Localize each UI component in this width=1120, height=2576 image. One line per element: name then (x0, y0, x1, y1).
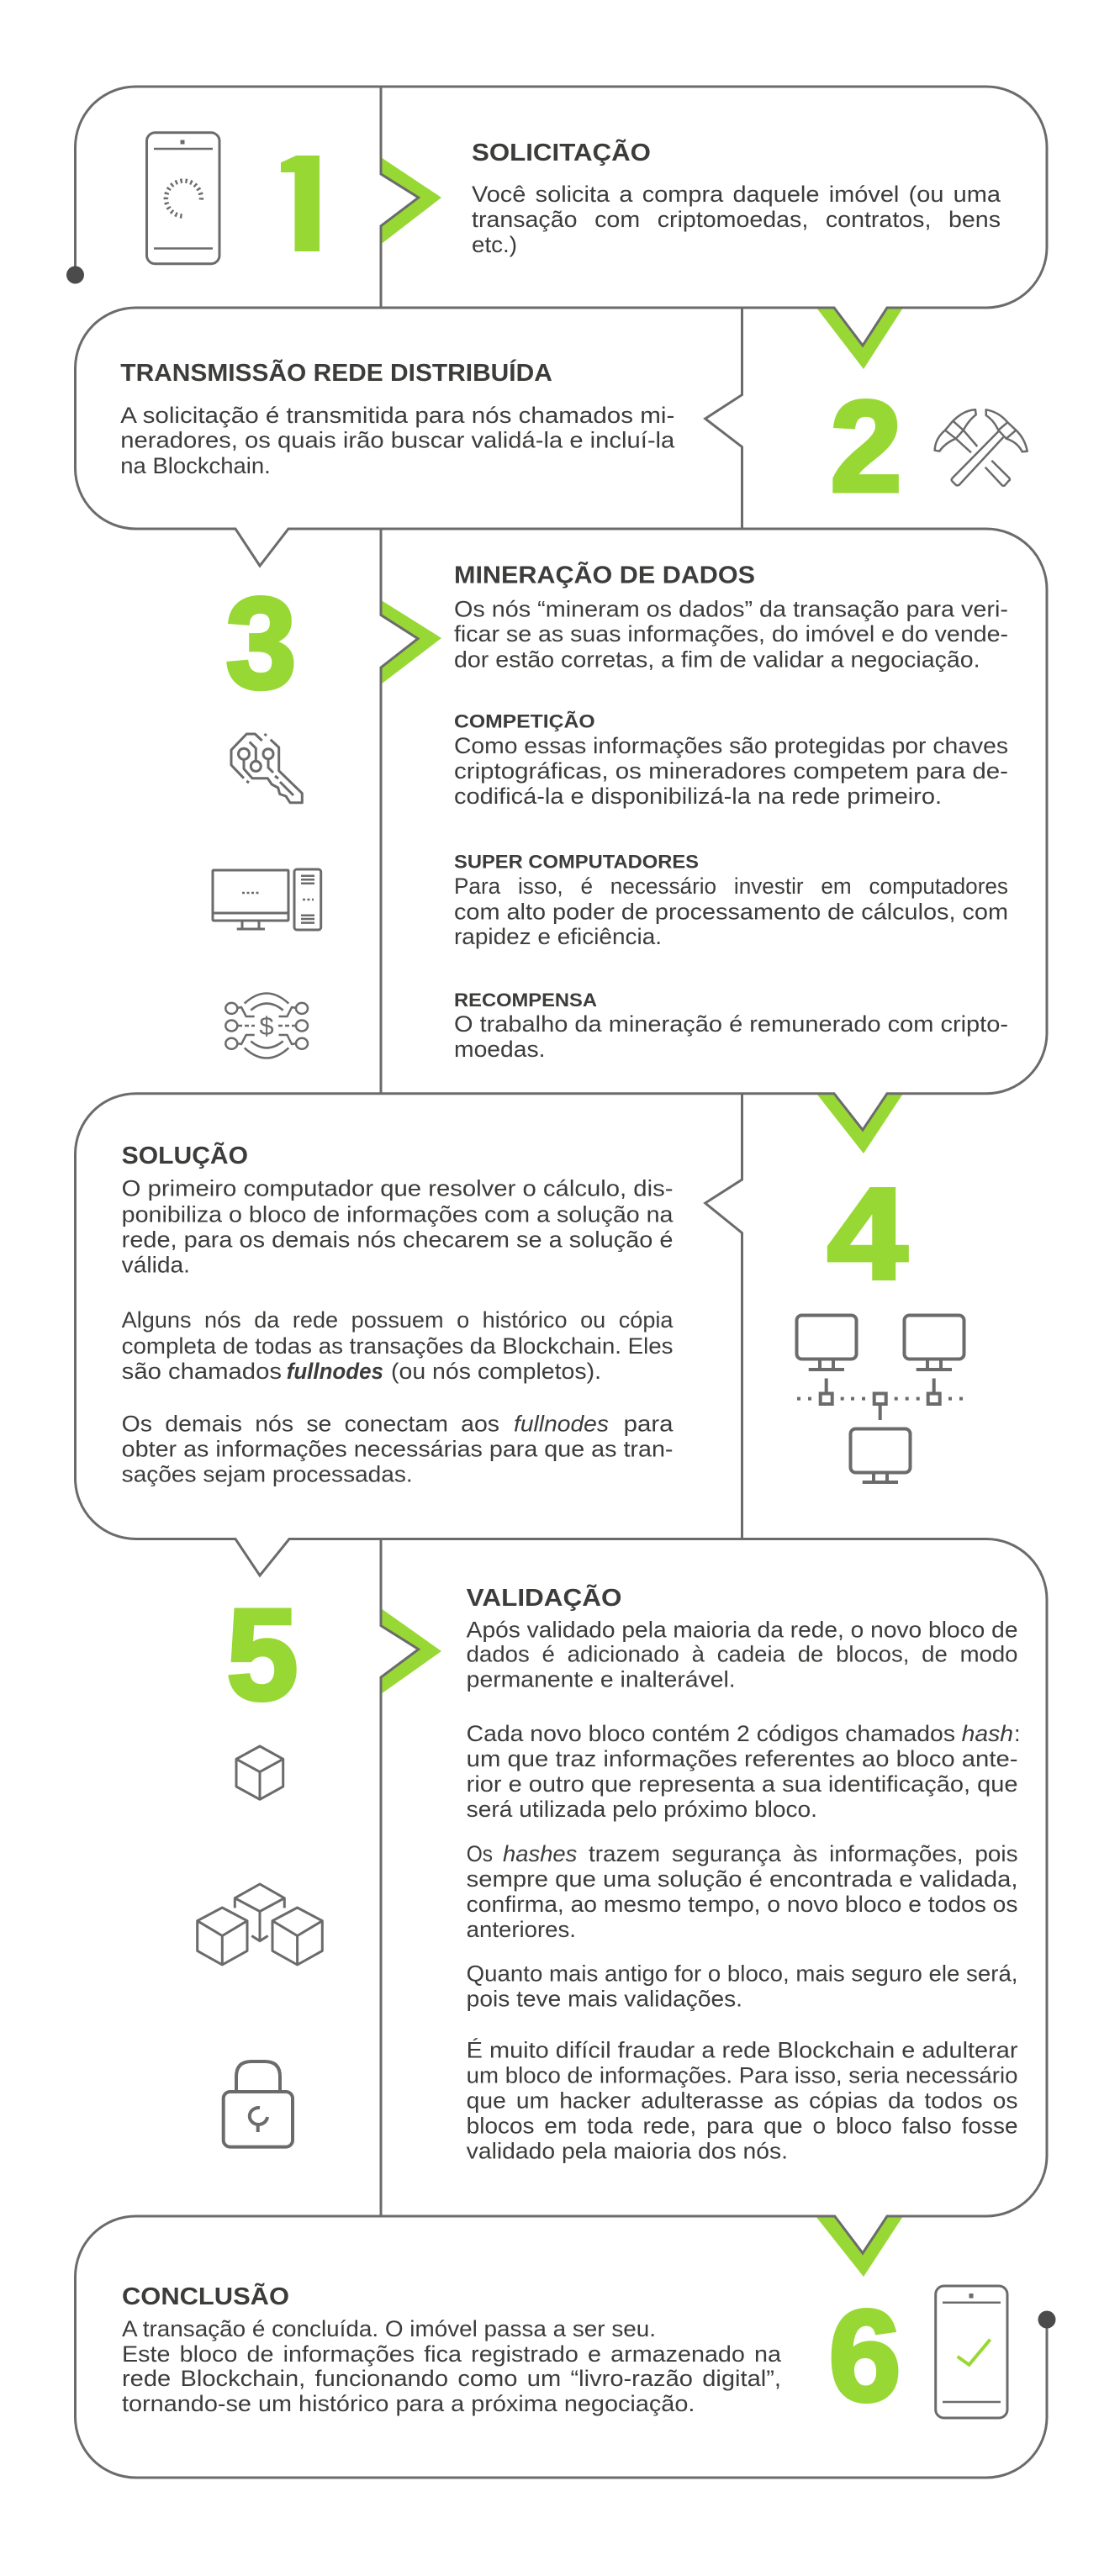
paragraph 1: ponibiliza o bloco de informações com a solução na (122, 1201, 674, 1227)
end dot (1038, 2310, 1056, 2329)
heading: SOLICITAÇÃO (472, 138, 651, 166)
heading: SOLUÇÃO (122, 1141, 248, 1169)
paragraph 3: para (624, 1412, 674, 1437)
paragraph 2 (467, 1721, 1021, 1822)
paragraph 2: rior e outro que representa a sua identificação, que (467, 1771, 1017, 1797)
body text (472, 182, 1001, 257)
paragraph 2: um que traz informações referentes ao bloco ante- (467, 1746, 1017, 1771)
paragraph 4 (467, 1961, 1017, 2012)
heading: MINERAÇÃO DE DADOS (454, 560, 755, 589)
super computadores text: rapidez e eficiência. (454, 924, 662, 949)
body text: etc.) (472, 232, 517, 257)
icon: crossed pickaxes (935, 409, 1028, 486)
paragraph 3: Os (467, 1841, 493, 1866)
paragraph 2: : (1014, 1721, 1021, 1746)
paragraph 1: válida. (122, 1252, 190, 1277)
paragraph 3 (467, 1841, 1017, 1942)
competição text (454, 733, 1008, 809)
body text (122, 2316, 782, 2416)
paragraph 3: Os demais nós se conectam aos (122, 1412, 499, 1437)
body text: Você solicita a compra daquele imóvel (ou uma (472, 182, 1001, 207)
body text: na Blockchain. (120, 453, 271, 478)
subheading: competição: COMPETIÇÃO (454, 711, 595, 732)
competição text: codificá-la e disponibilizá-la na rede primeiro. (454, 784, 942, 809)
paragraph 3: confirma, ao mesmo tempo, o novo bloco e todos os (467, 1892, 1017, 1917)
paragraph 3: sações sejam processadas. (122, 1462, 413, 1487)
icon: computer network (797, 1315, 964, 1482)
competição text: criptográficas, os mineradores competem para de- (454, 758, 1008, 784)
heading: VALIDAÇÃO (467, 1583, 622, 1612)
panel 2: transmissão rede distribuída (120, 358, 1028, 519)
paragraph 5: validado pela maioria dos nós. (467, 2139, 788, 2164)
icon: desktop computer (213, 869, 321, 930)
paragraph 2: fullnodes (287, 1359, 383, 1384)
paragraph 1: Após validado pela maioria da rede, o novo bloco de (467, 1617, 1017, 1642)
icon: phone with check (936, 2286, 1007, 2418)
paragraph 5: que um hacker adulterasse as cópias da todos os (467, 2088, 1017, 2114)
body text: tornando-se um histórico para a próxima negociação. (122, 2391, 695, 2416)
paragraph 2: Alguns nós da rede possuem o histórico ou cópia (122, 1307, 674, 1333)
paragraph 1 (122, 1176, 674, 1277)
paragraph 2: hash (962, 1721, 1013, 1746)
recompensa text: O trabalho da mineração é remunerado com cripto- (454, 1011, 1008, 1037)
heading: TRANSMISSÃO REDE DISTRIBUÍDA (120, 358, 552, 387)
recompensa text (454, 1011, 1008, 1062)
number 4: 4 (827, 1162, 907, 1306)
icon: circuit key (231, 734, 302, 803)
icon: dollar network: $ (259, 1011, 274, 1041)
icon: single block (236, 1746, 283, 1799)
paragraph 2: são chamados (122, 1359, 282, 1384)
super computadores text: com alto poder de processamento de cálculos, com (454, 900, 1008, 925)
paragraph 1: permanente e inalterável. (467, 1667, 736, 1692)
paragraph 3: anteriores. (467, 1917, 576, 1942)
paragraph 3: obter as informações necessárias para que as tran- (122, 1437, 673, 1462)
panel 6: conclusão (122, 2282, 1007, 2428)
paragraph 1: dados é adicionado à cadeia de blocos, de modo (467, 1642, 1017, 1667)
paragraph 2: será utilizada pelo próximo bloco. (467, 1797, 817, 1822)
body text: A solicitação é transmitida para nós chamados mi- (120, 403, 674, 428)
paragraph 4: Quanto mais antigo for o bloco, mais seguro ele será, (467, 1961, 1017, 1987)
paragraph 2: (ou nós completos). (391, 1359, 601, 1384)
column dividers with arrow notches (381, 87, 742, 2216)
paragraph 3: trazem segurança às informações, pois (589, 1841, 1017, 1866)
super computadores text (454, 874, 1008, 949)
paragraph 2: completa de todas as transações da Blockchain. Eles (122, 1333, 673, 1359)
subheading: super computadores: SUPER COMPUTADORES (454, 852, 699, 873)
body text: Os nós “mineram os dados” da transação para veri- (454, 597, 1008, 622)
number 2: 2 (831, 374, 901, 519)
paragraph 3: hashes (503, 1841, 577, 1866)
number 6: 6 (829, 2283, 901, 2428)
number 1: 1 (250, 128, 359, 282)
paragraph 3: sempre que uma solução é encontrada e validada, (467, 1866, 1017, 1892)
body text: dor estão corretas, a fim de validar a negociação. (454, 647, 980, 673)
paragraph 3: fullnodes (514, 1412, 609, 1437)
icon: phone loading (146, 133, 219, 264)
heading: CONCLUSÃO (122, 2282, 289, 2310)
body text (454, 597, 1008, 673)
super computadores text: Para isso, é necessário investir em computadores (454, 874, 1008, 899)
paragraph 3 (122, 1412, 674, 1487)
start dot (66, 266, 84, 284)
body text: neradores, os quais irão buscar validá-la e incluí-la (120, 428, 675, 453)
panel 4: solução (122, 1141, 964, 1487)
paragraph 5: É muito difícil fraudar a rede Blockchain e adulterar (467, 2038, 1018, 2063)
icon: padlock (224, 2061, 293, 2147)
icon: three blocks (198, 1884, 322, 1965)
body text: ficar se as suas informações, do imóvel e do vende- (454, 621, 1008, 647)
paragraph 2 (122, 1307, 674, 1384)
body text: A transação é concluída. O imóvel passa a ser seu. (122, 2316, 656, 2341)
panel 1: solicitação (145, 131, 1001, 266)
paragraph 4: pois teve mais validações. (467, 1987, 742, 2012)
body text: transação com criptomoedas, contratos, bens (472, 207, 1001, 232)
body text (120, 403, 675, 478)
number 3: 3 (225, 571, 296, 715)
paragraph 1 (467, 1617, 1017, 1692)
paragraph 5: blocos em toda rede, para que o bloco falso fosse (467, 2114, 1017, 2139)
icon: dollar network (225, 994, 308, 1058)
panel 5: validação (198, 1582, 1021, 2164)
body text: Este bloco de informações fica registrado e armazenado na (122, 2341, 782, 2367)
subheading: recompensa: RECOMPENSA (454, 990, 597, 1011)
paragraph 5 (467, 2038, 1018, 2164)
competição text: Como essas informações são protegidas por chaves (454, 733, 1008, 758)
panel 3: mineração de dados (213, 560, 1008, 1062)
green arrows between steps (381, 157, 903, 2277)
number 5: 5 (227, 1582, 298, 1727)
paragraph 1: O primeiro computador que resolver o cálculo, dis- (122, 1176, 674, 1201)
recompensa text: moedas. (454, 1037, 545, 1062)
paragraph 5: um bloco de informações. Para isso, seria necessário (467, 2063, 1017, 2088)
paragraph 2: Cada novo bloco contém 2 códigos chamados (467, 1721, 955, 1746)
paragraph 1: rede, para os demais nós checarem se a solução é (122, 1227, 673, 1252)
body text: rede Blockchain, funcionando como um “livro-razão digital”, (122, 2366, 781, 2391)
